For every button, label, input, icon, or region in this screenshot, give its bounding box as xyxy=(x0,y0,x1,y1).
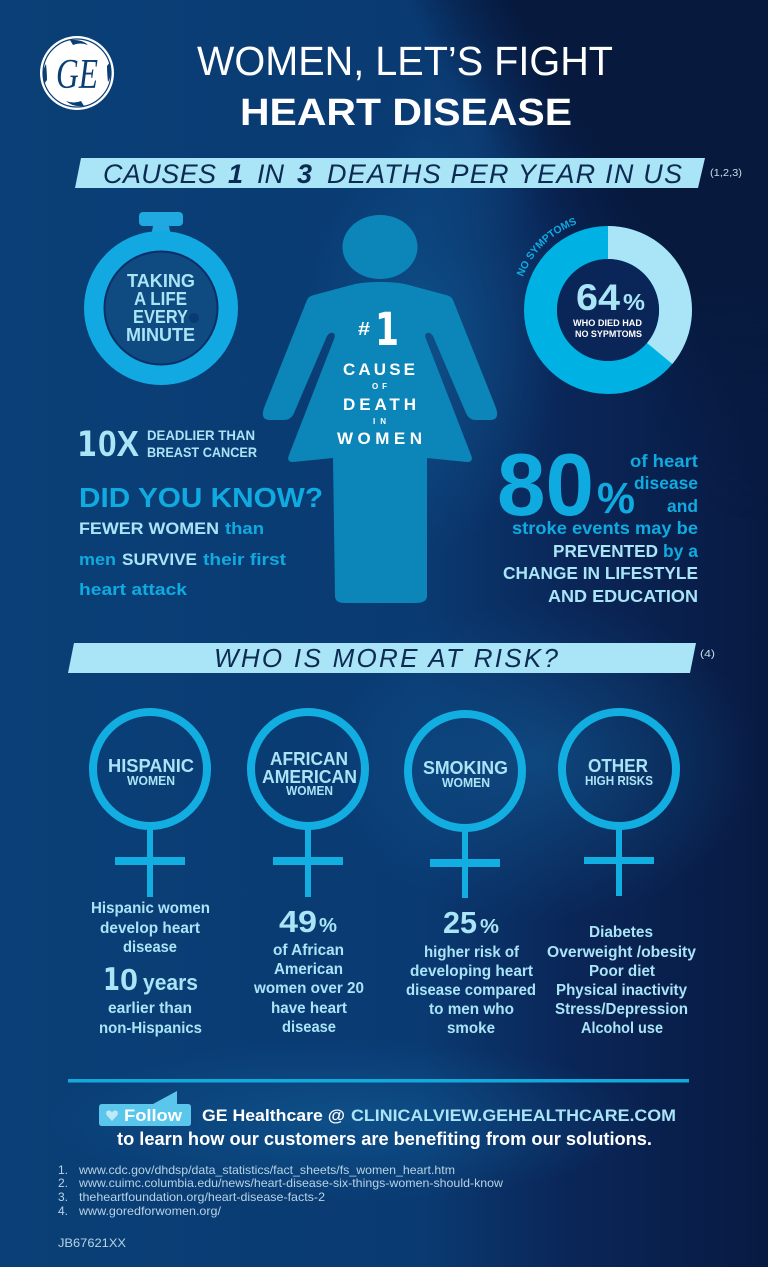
woman figure: WOMEN xyxy=(337,429,422,448)
risk column: African American women: % xyxy=(319,915,337,937)
risk column: African American women: American xyxy=(274,961,343,978)
risk column: Hispanic women: 1 xyxy=(103,962,120,998)
risk column: other high risks: Poor diet xyxy=(589,963,655,980)
risk column: other high risks: OTHER xyxy=(588,756,648,776)
risk column: Hispanic women: 0 xyxy=(120,962,138,997)
stat: 10X deadlier: 0X xyxy=(98,423,139,464)
woman figure: OF xyxy=(372,382,387,391)
risk column: Hispanic women: Hispanic women xyxy=(91,900,210,917)
icon: stopwatch: EVERY xyxy=(133,307,188,327)
icon: stopwatch: A LIFE xyxy=(134,289,187,309)
stat: 80% preventable: and xyxy=(667,496,698,516)
risk column: African American women: have heart xyxy=(271,1000,347,1017)
did you know xyxy=(79,482,323,599)
risk column: other high risks: Stress/Depression xyxy=(555,1001,688,1018)
stat: 10X deadlier: 1 xyxy=(77,425,97,465)
risk column: Hispanic women: years xyxy=(143,970,198,995)
citation 1,2,3: (1,2,3) xyxy=(710,168,742,179)
woman figure xyxy=(263,215,497,603)
donut chart: 64%: WHO DIED HAD xyxy=(573,318,642,329)
title: HEART DISEASE xyxy=(240,92,572,134)
references: www.cuimc.columbia.edu/news/heart-disease-six-things-women-should-know xyxy=(78,1176,503,1190)
risk column: Hispanic women: develop heart xyxy=(100,920,200,937)
did you know: FEWER WOMEN xyxy=(79,519,219,538)
banner: causes 1 in 3 deaths: 3 xyxy=(297,159,312,189)
stat: 80% preventable: CHANGE IN LIFESTYLE xyxy=(503,563,698,583)
banner: causes 1 in 3 deaths xyxy=(75,158,705,189)
risk column: smoking women: WOMEN xyxy=(442,775,490,790)
woman figure: CAUSE xyxy=(343,360,415,379)
risk column: smoking women: higher risk of xyxy=(424,944,520,961)
icon: stopwatch xyxy=(94,212,228,375)
risk column: Hispanic women: HISPANIC xyxy=(108,756,194,776)
job code: JB67621XX xyxy=(58,1236,126,1250)
risk column: Hispanic women: WOMEN xyxy=(127,773,175,788)
did you know: heart attack xyxy=(79,580,188,599)
references: 1. xyxy=(58,1163,68,1177)
stat: 80% preventable: AND EDUCATION xyxy=(548,586,698,606)
risk column: other high risks: Physical inactivity xyxy=(556,982,687,999)
risk column: smoking women: % xyxy=(480,916,499,938)
risk column: smoking women: to men who xyxy=(429,1001,514,1018)
references: 3. xyxy=(58,1190,68,1204)
risk column: other high risks: Diabetes xyxy=(589,924,653,941)
references: theheartfoundation.org/heart-disease-facts-2 xyxy=(79,1190,325,1204)
woman figure: # xyxy=(358,319,370,339)
follow button xyxy=(99,1091,191,1126)
donut chart: 64%: NO SYMPTOMS xyxy=(516,218,576,276)
risk column: smoking women: 25 xyxy=(443,905,477,940)
references: www.goredforwomen.org/ xyxy=(78,1204,222,1218)
stat: 80% preventable: 80 xyxy=(497,435,594,534)
risk column: African American women: 49 xyxy=(279,904,317,939)
icon: stopwatch: TAKING xyxy=(127,271,195,291)
risk column: Hispanic women: earlier than xyxy=(108,1000,192,1017)
risk column: other high risks: Overweight /obesity xyxy=(547,944,696,961)
risk column: Hispanic women: disease xyxy=(123,939,177,956)
risk column: other high risks: Alcohol use xyxy=(581,1020,663,1037)
banner: causes 1 in 3 deaths: 1 xyxy=(228,159,243,189)
stat: 80% preventable: % xyxy=(597,474,635,523)
did you know: than xyxy=(225,519,264,538)
woman figure: IN xyxy=(373,417,386,426)
did you know: their first xyxy=(203,550,286,569)
donut chart: 64%: NO SYPMTOMS xyxy=(575,329,642,340)
banner: who is more at risk: WHO IS MORE AT RISK? xyxy=(214,643,559,673)
banner: who is more at risk xyxy=(68,643,696,673)
call to action: to learn how our customers are benefiting from our solutions. xyxy=(117,1129,652,1149)
follow button: Follow xyxy=(124,1106,183,1125)
risk column: smoking women: SMOKING xyxy=(423,758,508,778)
banner: causes 1 in 3 deaths: CAUSES xyxy=(103,159,216,189)
donut chart: 64% xyxy=(516,218,692,394)
logo: GE monogram: GE xyxy=(56,52,98,98)
risk column: Hispanic women: non-Hispanics xyxy=(99,1020,202,1037)
title: WOMEN, LET’S FIGHT xyxy=(197,38,613,84)
risk column: African American women: WOMEN xyxy=(286,783,333,798)
stat: 80% preventable xyxy=(497,435,698,606)
risk column: African American women: women over 20 xyxy=(253,980,364,997)
risk column: smoking women: disease compared xyxy=(406,982,536,999)
risk column: other high risks: HIGH RISKS xyxy=(585,773,653,788)
title xyxy=(197,38,613,134)
risk column: African American women: AMERICAN xyxy=(262,767,357,787)
call to action: GE Healthcare @ xyxy=(202,1106,345,1125)
stat: 10X deadlier xyxy=(77,423,257,465)
risk column: African American women: disease xyxy=(282,1019,336,1036)
did you know: men xyxy=(79,550,116,569)
stat: 80% preventable: by a xyxy=(663,541,698,561)
risk column: African American women: of African xyxy=(273,942,344,959)
references xyxy=(58,1163,503,1218)
references: 2. xyxy=(58,1176,68,1190)
stat: 10X deadlier: BREAST CANCER xyxy=(147,444,257,460)
banner: causes 1 in 3 deaths: IN xyxy=(257,159,284,189)
did you know: DID YOU KNOW? xyxy=(79,482,323,513)
donut chart: 64%: % xyxy=(623,289,645,315)
stat: 80% preventable: of heart xyxy=(630,451,698,471)
call to action xyxy=(117,1106,676,1149)
woman figure: 1 xyxy=(375,303,399,356)
citation 4: (4) xyxy=(700,649,715,660)
risk column: smoking women: smoke xyxy=(447,1020,495,1037)
banner: causes 1 in 3 deaths: DEATHS PER YEAR IN US xyxy=(327,159,682,189)
stat: 10X deadlier: DEADLIER THAN xyxy=(147,427,255,443)
risk column: smoking women xyxy=(406,714,536,1037)
risk column: smoking women: developing heart xyxy=(410,963,533,980)
risk column: Hispanic women xyxy=(91,712,210,1037)
stat: 80% preventable: disease xyxy=(634,473,698,493)
did you know: SURVIVE xyxy=(122,550,197,569)
call to action: CLINICALVIEW.GEHEALTHCARE.COM xyxy=(351,1106,676,1125)
risk column: other high risks xyxy=(547,712,696,1037)
stat: 80% preventable: PREVENTED xyxy=(553,541,658,561)
icon: stopwatch: MINUTE xyxy=(126,325,195,345)
woman figure: DEATH xyxy=(343,395,416,414)
references: www.cdc.gov/dhdsp/data_statistics/fact_sheets/fs_women_heart.htm xyxy=(78,1163,455,1177)
risk column: African American women: AFRICAN xyxy=(270,749,348,769)
stat: 80% preventable: stroke events may be xyxy=(512,518,698,538)
donut chart: 64%: 64 xyxy=(576,277,620,318)
references: 4. xyxy=(58,1204,68,1218)
risk column: African American women xyxy=(251,712,365,1036)
logo: GE monogram xyxy=(40,36,114,110)
